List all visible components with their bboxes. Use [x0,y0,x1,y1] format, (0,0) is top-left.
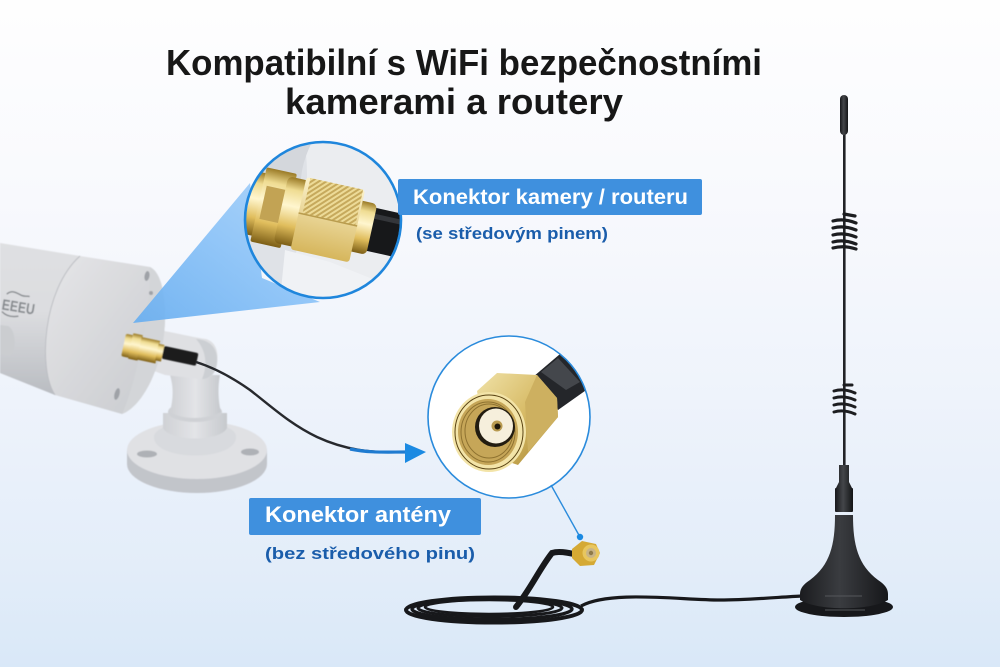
detail circle: camera connector [244,140,402,300]
upper coil [833,214,856,249]
camera brand logo: EEEU [1,297,36,319]
antenna SMA connector [572,541,600,566]
camera brand logo [0,290,37,320]
antenna [795,95,893,617]
camera slot [0,325,15,356]
label: antenna connector [249,498,481,535]
label: antenna connector: Konektor antény [265,502,452,527]
note: with centre pin: (se středovým pinem) [416,224,608,243]
zoom beam to camera connector [133,183,320,323]
label: camera/router connector [398,179,702,215]
antenna whip [840,95,848,470]
detail circle: antenna connector [428,336,592,498]
camera end cap [45,256,165,414]
lower coil [834,385,855,414]
magnetic base [795,465,893,617]
cable and arrow to antenna connector [196,362,426,463]
camera illustration [0,243,267,493]
label: camera/router connector: Konektor kamery / routeru [413,186,688,209]
leader line to antenna connector [551,485,583,540]
camera body [0,243,80,395]
note: without centre pin: (bez středového pinu) [265,544,475,563]
title: kamerami a routery [285,81,623,122]
title [166,42,762,122]
title: Kompatibilní s WiFi bezpečnostními [166,42,762,83]
small connector on camera [121,332,200,373]
camera wall mount [127,327,267,493]
antenna cable coil [406,552,802,622]
